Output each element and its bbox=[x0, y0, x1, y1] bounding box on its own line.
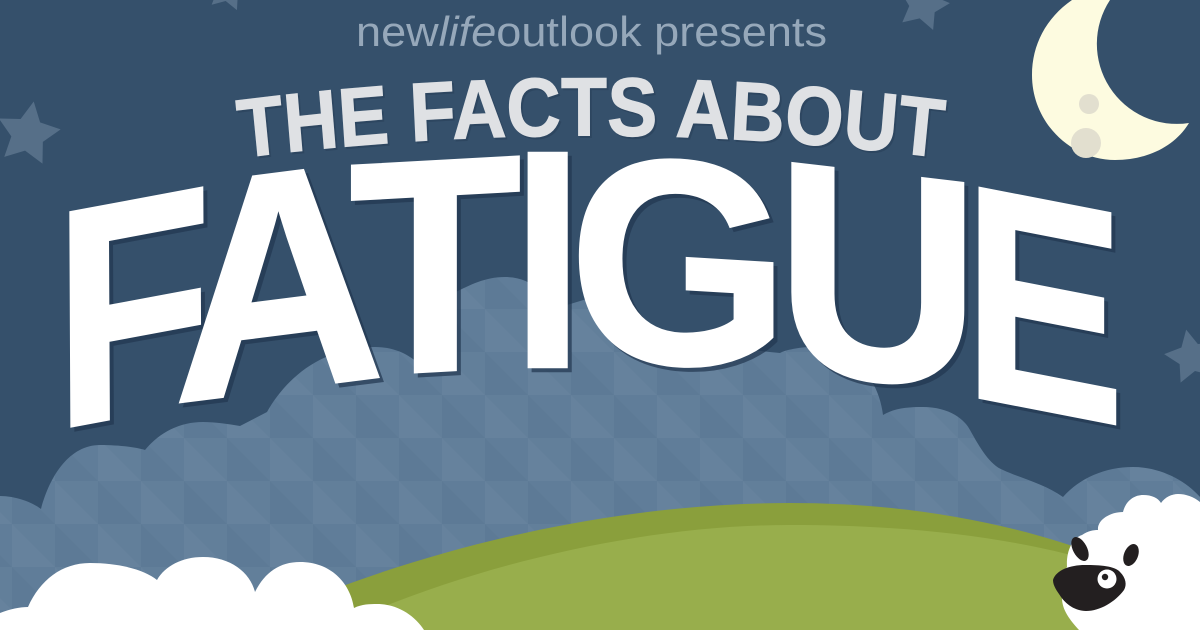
sheep left ear bbox=[1068, 534, 1092, 564]
presenter line: newlifeoutlook presents bbox=[356, 8, 827, 55]
heading: fatigue: U bbox=[775, 97, 980, 456]
heading: fatigue bbox=[53, 87, 1125, 496]
heading: fatigue: G bbox=[568, 94, 790, 433]
sheep bbox=[1053, 494, 1200, 630]
icon: star left bbox=[0, 96, 65, 166]
heading: the facts about: THE FACTS ABOUT bbox=[235, 77, 948, 158]
sheep wool body bbox=[1060, 494, 1200, 630]
icon: star right bbox=[1160, 324, 1200, 385]
icon: crescent moon bbox=[1032, 0, 1189, 160]
white foreground cloud bbox=[0, 557, 424, 630]
heading: fatigue: I bbox=[511, 87, 584, 434]
sheep face bbox=[1053, 565, 1126, 611]
green hill bbox=[340, 503, 1090, 630]
icon: star top left bbox=[204, 0, 253, 12]
heading: fatigue: F bbox=[53, 120, 213, 496]
quilted background cloud bbox=[0, 277, 1200, 630]
icon: star top right bbox=[893, 0, 954, 32]
sheep right ear bbox=[1120, 542, 1142, 568]
heading: fatigue: A bbox=[171, 91, 386, 470]
sheep eye bbox=[1098, 570, 1116, 588]
heading: fatigue: E bbox=[963, 119, 1125, 491]
heading: fatigue: T bbox=[349, 91, 522, 441]
